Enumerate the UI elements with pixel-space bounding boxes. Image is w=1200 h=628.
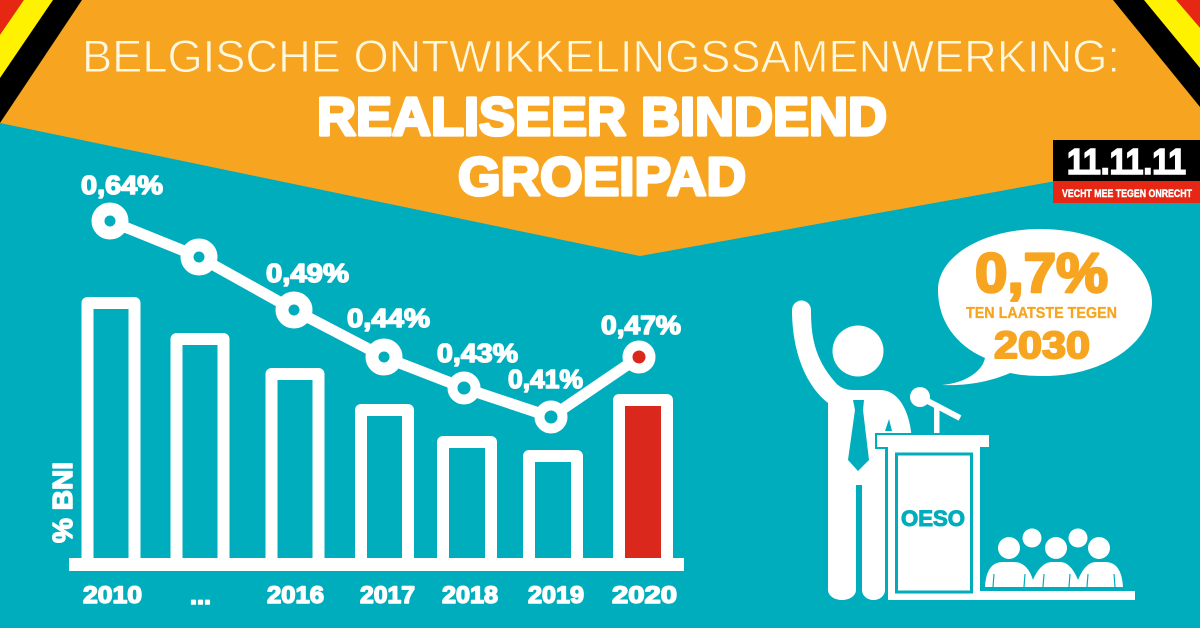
bar chart — [69, 303, 684, 571]
title line 2: REALISEER BINDEND — [317, 87, 887, 147]
speech bubble — [938, 229, 1152, 385]
label 0,64%: 0,64% — [81, 170, 163, 200]
bar 2019 — [529, 456, 577, 565]
label 0,49%: 0,49% — [266, 258, 349, 288]
speaker head — [832, 326, 884, 376]
bar 2017 — [361, 410, 408, 565]
flag stripes: top right — [1113, 0, 1200, 107]
data labels — [81, 170, 681, 394]
point 2019 — [540, 406, 562, 428]
floor line — [980, 591, 1135, 600]
label 0,47%: 0,47% — [601, 310, 681, 340]
year ellipsis: ... — [190, 583, 211, 610]
point 2011-2015 — [187, 245, 211, 269]
speaker arm and body — [792, 300, 912, 600]
icon: speaker — [792, 300, 912, 600]
icon: lectern — [875, 433, 990, 600]
line chart — [98, 209, 650, 428]
y axis label: % BNI — [47, 462, 78, 543]
bar 2011-2015 — [176, 339, 224, 565]
icon: microphone — [910, 387, 960, 436]
title line 3: GROEIPAD — [458, 147, 746, 207]
header banner: orange — [0, 0, 1200, 256]
lectern label OESO: OESO — [901, 506, 965, 531]
callout 2030: 2030 — [994, 325, 1090, 367]
logo: 11.11.11: 11.11.11 — [1067, 141, 1186, 182]
icon: audience — [985, 528, 1123, 587]
title line 1: BELGISCHE ONTWIKKELINGSSAMENWERKING: — [82, 31, 1120, 82]
year 2020: 2020 — [612, 582, 677, 609]
axis baseline — [69, 558, 684, 571]
bar 2016 — [272, 374, 318, 565]
logo: 11.11.11 — [1053, 140, 1200, 203]
speaker tie — [848, 400, 869, 471]
label 0,41%: 0,41% — [508, 364, 583, 394]
year 2017: 2017 — [360, 582, 415, 609]
point 2018 — [452, 376, 476, 400]
point 2016 — [282, 298, 306, 322]
year 2018: 2018 — [442, 582, 498, 609]
bar 2010 — [88, 303, 134, 565]
point 2017 — [372, 345, 396, 369]
x axis labels — [83, 582, 677, 610]
callout 0,7%: 0,7% — [975, 241, 1108, 304]
label 0,44%: 0,44% — [347, 303, 430, 333]
flag stripes: top left — [0, 0, 82, 123]
bar 2020: red — [619, 400, 667, 565]
year 2016: 2016 — [267, 582, 324, 609]
bar 2018 — [443, 442, 491, 565]
arm sliver — [885, 419, 892, 431]
label 0,43%: 0,43% — [437, 338, 518, 368]
callout subtitle: TEN LAATSTE TEGEN — [966, 305, 1117, 322]
year 2019: 2019 — [528, 582, 584, 609]
point 2010 — [98, 209, 122, 233]
year 2010: 2010 — [83, 582, 142, 609]
point 2020: red — [628, 346, 650, 368]
